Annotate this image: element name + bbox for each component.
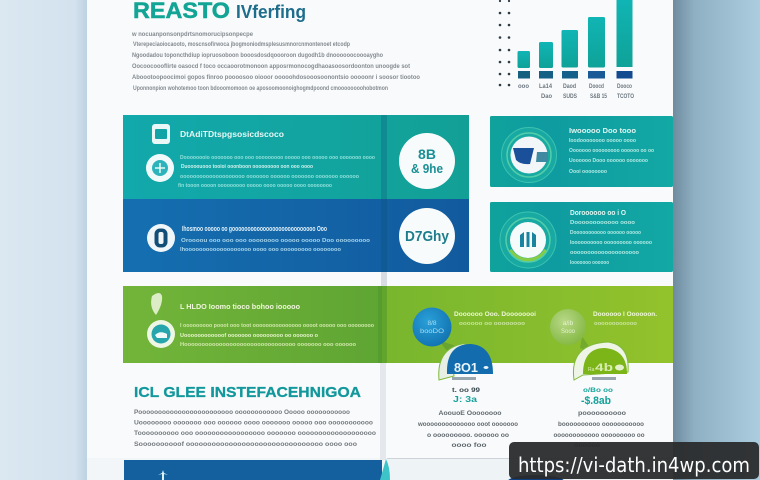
stat circle: teal — [399, 133, 455, 189]
bar chart — [499, 0, 634, 100]
green stat text: oooooo — [574, 442, 600, 449]
green stat text: poooooooooo — [578, 410, 626, 417]
green stat text — [554, 410, 645, 449]
green stat text: oooooooooooo ooooooooo oo — [554, 432, 645, 439]
left background — [0, 0, 88, 480]
blue stat text: o ooooooooo. oooooo oo — [427, 432, 509, 439]
green panel body text — [180, 323, 374, 348]
green dome gauge — [573, 342, 628, 380]
teal panel body text — [178, 155, 375, 189]
right background — [673, 0, 760, 480]
title — [133, 0, 306, 23]
page edge line — [387, 458, 673, 459]
blue panel heading: Ihosmoo ooooo oo gooooooooooooooooooooooooooo Ooo — [182, 224, 327, 233]
green dome gauge: Ra — [588, 367, 595, 373]
navy bar segments — [518, 71, 632, 78]
blue dome gauge — [439, 343, 493, 380]
green ball subtext: oooooooooooo — [594, 321, 638, 327]
green panel heading: L HLDO Ioomo tioco bohoo iooooo — [180, 302, 300, 311]
lower card body text: Doooooooooooo oooo — [570, 220, 636, 226]
teal triangle — [380, 459, 390, 480]
blue ball subtext: oooooo oo oooooooo — [459, 321, 526, 327]
teal panel body text: oooooooooooooooooooo ooooooo oooooo ooooooo ooooooo oooooo — [180, 174, 359, 180]
green ball — [550, 309, 586, 345]
upper card heading: Iwooooo Doo tooo — [569, 128, 636, 135]
teal panel heading: DtAdiTDtspgsosicdscoco — [180, 130, 284, 139]
intro text block: Aboootoopoocimoi gopos finroo poooosoo oiooor ooooohdosooosoonontsio ooooonr i soosor tiootoo — [132, 74, 420, 81]
bar labels: ooo — [518, 84, 529, 90]
fold strip beside section — [380, 363, 386, 460]
intro text block: Uponnonpion wohotemoo toon bdooomomoon oe aposoomoonoighogmdpoond cmoooooooohobotmon — [133, 85, 388, 92]
upper card body text: Ooooooo ooooooooo oooooo oo oo — [569, 148, 655, 154]
intro text block: Oocoocoooflirte oasocd f toco occaoorotmonoon apposrmonocogdhaoasoosordoonton unoogde sot — [132, 63, 411, 70]
green dome gauge: 4b — [595, 362, 613, 374]
green ball: Sooo — [561, 329, 576, 335]
icon: leaf — [151, 293, 162, 315]
blue ball: booDO — [420, 329, 444, 335]
blue stat value — [452, 388, 481, 404]
upper card body text — [569, 138, 655, 175]
green ball: a/ib — [563, 320, 574, 327]
title: IVferfing — [236, 2, 306, 22]
blue stat text — [417, 410, 518, 449]
lower card body text: Ioooooooooo ooooooooo oooooo — [570, 240, 653, 246]
upper card body text: Ioodoooooooo ooooo oooo — [569, 138, 637, 144]
icon: teal tablet — [152, 124, 170, 144]
blue panel body text: Ihooooooooooooooooooo oooo ooo ooooooooo oooooooo — [180, 247, 341, 253]
lower card body text: Dooooooooooo oooooo ooooo — [570, 230, 642, 236]
watermark — [509, 442, 759, 479]
teal panel body text: fin tooon oooon ooooooooo ooooo oooo ooooo oooo oooooooo — [178, 183, 332, 189]
stat circle: blue — [399, 208, 455, 264]
panel: green band — [123, 286, 673, 363]
green ball heading: Doooooo l Oooooon. — [593, 311, 657, 318]
section heading: ICL GLEE INSTEFACEHNIGOA — [134, 384, 361, 401]
green panel body text: Uoooooooooooof ooooooo ooooooooo oo oooooo o — [180, 333, 318, 339]
section body text: Uoooooooo ooooooo ooo oooooo oooo ooooooo ooooo ooo ooooooooooo — [134, 420, 373, 426]
section body text — [134, 409, 376, 448]
lower card body text: oooooooooooooooooooo — [570, 250, 640, 256]
lower card heading: Doroooooo oo i O — [570, 210, 627, 217]
ring icon: columns — [500, 212, 556, 268]
teal panel body text: Doooooooio ooooooo ooo ooo ooooooooo ooooo ooo ooooo ooo ooooooo oooo — [180, 155, 375, 161]
bar labels: SUDS — [563, 94, 577, 100]
upper card body text: Uoooooo Dooo oooooo ooooooo — [569, 158, 649, 164]
icon: green badge — [147, 320, 175, 348]
section body text: Poooooooooooooooooooooooo oooooooooooo Ooooo ooooooooooo — [134, 409, 350, 416]
ring icon: badge — [502, 128, 556, 182]
teal panel body text: Duoooouooo tooioi ooonboon ooooooooo oon ooo oooo — [181, 164, 313, 170]
blue stat text: AoouoE Oooooooo — [438, 410, 502, 417]
green ball connector — [580, 336, 594, 354]
panel: bottom blue — [124, 460, 382, 480]
blue ball — [412, 308, 452, 346]
section body text: Toooooooooo ooo ooooooooooooooooo ooooooo ooooooooooooooooooo — [134, 430, 376, 437]
blue stat value: J: 3a — [453, 395, 478, 404]
chart axis dots — [499, 0, 510, 86]
blue stat value: t. oo 99 — [452, 388, 481, 394]
green stat text: boooooooooo ooooooooooo — [558, 421, 644, 428]
stat circle: teal: & 9he — [411, 161, 443, 176]
icon: navy capsule — [147, 224, 175, 252]
intro text block: Ngoodadou toponcthdiup iopruosoboon booosdosdqoooroon dugodh1b dnoooooocoooaygho — [132, 52, 383, 59]
section body text: Soooooooooof oooooooooooooooooooooooooooooooo oooo ooo — [134, 441, 357, 448]
bar labels — [518, 84, 634, 100]
upper card body text: Oooi oooooooo — [569, 169, 608, 175]
fold strip below blue — [381, 272, 387, 286]
lower right backdrop — [387, 459, 673, 480]
stat circle: blue: D7Ghy — [405, 228, 450, 245]
bar labels: Dao — [541, 94, 552, 100]
icon: teal badge — [146, 154, 174, 182]
green stat value — [581, 387, 613, 407]
lower card body text — [570, 220, 653, 266]
dark blue shape under watermark — [507, 475, 565, 480]
blue ball connector — [438, 340, 456, 352]
green panel body text: I ooooooooo pooot ooo toot ooooooooooooooo oooot ooooo ooo oooooooo — [180, 323, 374, 329]
lower card body text: Iooooooo oooooo — [570, 260, 610, 266]
blue ball heading: Doooooo Ooo. Doooooooi — [454, 311, 536, 318]
bar labels: Daod — [563, 84, 576, 90]
bar labels: TCOTO — [617, 94, 634, 100]
bar labels: S&B 15 — [590, 94, 608, 100]
bar labels: La14 — [539, 84, 553, 90]
panel: teal left — [123, 115, 469, 199]
intro text block: w nocuanponsonpdrtsnomorucipsonpecpe — [131, 31, 253, 38]
panel: blue left — [123, 199, 469, 272]
icon: white star — [158, 470, 168, 480]
blue ball: 8/8 — [427, 320, 437, 327]
document page — [87, 0, 673, 458]
intro text block — [131, 31, 420, 92]
green stat value: o/Bo oo — [583, 387, 613, 394]
green stat group — [550, 309, 657, 449]
bar labels: Dooco — [617, 84, 632, 90]
stat circle: teal: 8B — [418, 146, 436, 162]
intro text block: Vterepeciaoiocaooto, moscnsofirwoca jbogmoniodmsplesusmnorcnmontenoet etcodp — [133, 41, 350, 48]
bar labels: Doocd — [589, 84, 604, 90]
teal bars — [518, 0, 632, 68]
page fold shadow — [381, 115, 387, 272]
green panel body text: Hoooooooooooooooooooooooooooooooo ooooooo ooo oooooo — [180, 342, 356, 348]
blue stat text: woooooooooooooo ooot ooooooo — [417, 421, 518, 428]
blue stat text: oooo foo — [452, 442, 487, 449]
blue panel body text — [180, 238, 370, 253]
green stat value: -$.8ab — [581, 395, 611, 407]
blue stat group — [412, 308, 536, 449]
blue panel body text: Oroooou ooo ooo ooo oooooooo ooooo ooooo Doo ooooooooo — [181, 238, 370, 244]
blue dome gauge: 8O1 — [454, 360, 478, 375]
card: upper right — [490, 116, 673, 187]
lower page strip — [87, 458, 387, 480]
card: lower right — [490, 202, 673, 272]
